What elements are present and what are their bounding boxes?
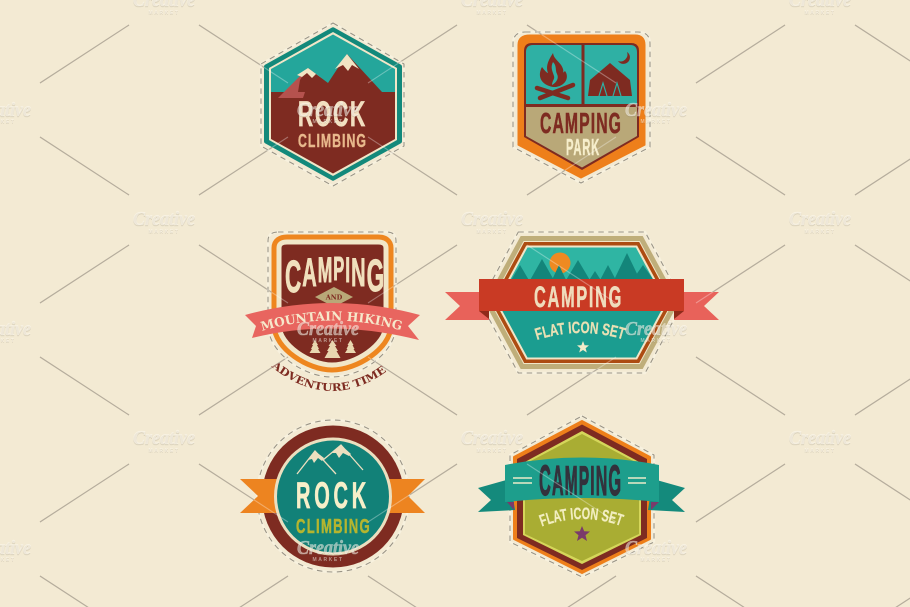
- watermarks: Creative: [461, 208, 523, 230]
- diamond: and: [315, 287, 353, 307]
- text: mountain hiking: MOUNTAIN HIKING: [260, 311, 402, 331]
- watermarks: MARKET: [476, 448, 508, 454]
- text: camping warped: I: [345, 250, 351, 290]
- ribbon: orange tails: [240, 479, 425, 513]
- ribbon: teal banner: [505, 458, 659, 502]
- scene panels: [526, 45, 637, 104]
- text: climbing: CLIMBING: [298, 131, 367, 151]
- text: camping: C: [539, 457, 552, 504]
- watermarks: Creative: [625, 318, 687, 340]
- text: camping: CAMPING: [540, 108, 622, 140]
- icon: star: [574, 526, 590, 541]
- text: rock: ROCK: [296, 475, 370, 516]
- badge: camping flat icon set hexagon: [445, 231, 719, 374]
- watermarks: MARKET: [312, 557, 344, 563]
- watermarks: Creative: [133, 427, 195, 449]
- text: camping warped: A: [302, 249, 318, 295]
- watermarks: MARKET: [640, 338, 672, 344]
- text: adventure time: ADVENTURE TIME: [271, 363, 386, 392]
- text: camping: N: [596, 457, 608, 504]
- mountains: [271, 54, 395, 174]
- watermarks: MARKET: [640, 557, 672, 563]
- ribbon tails: [478, 479, 685, 512]
- watermarks: MARKET: [476, 229, 508, 235]
- watermarks: MARKET: [804, 10, 836, 16]
- text: camping warped: C: [285, 252, 302, 302]
- icon: star: [577, 341, 589, 352]
- text: camping: P: [579, 457, 590, 504]
- watermarks: MARKET: [148, 10, 180, 16]
- badge: rock climbing circle: [240, 420, 425, 572]
- text: camping warped: G: [367, 251, 385, 301]
- text: camping: I: [590, 457, 596, 504]
- watermarks: Creative: [789, 427, 851, 449]
- watermarks: MARKET: [640, 119, 672, 125]
- text: flat icon set: FLAT ICON SET: [538, 507, 625, 526]
- icon: campfire: [537, 53, 573, 98]
- watermarks: Creative: [297, 537, 359, 559]
- text: camping: CAMPING: [534, 281, 623, 314]
- landscape panel: [502, 248, 661, 358]
- badge: camping park shield: [513, 32, 650, 183]
- text: camping warped: N: [351, 249, 367, 295]
- text: camping: A: [552, 457, 565, 504]
- watermarks: MARKET: [312, 119, 344, 125]
- sky: [271, 34, 395, 92]
- watermarks: Creative: [133, 208, 195, 230]
- watermarks: Creative: [297, 318, 359, 340]
- ribbon tails: [445, 292, 719, 320]
- text: flat icon set: FLAT ICON SET: [534, 321, 626, 340]
- ribbon: mountain hiking: [245, 303, 420, 340]
- watermarks: Creative: [297, 99, 359, 121]
- diamond: and: AND: [325, 294, 343, 302]
- icon: tent and moon: [588, 52, 632, 96]
- text: camping warped: M: [318, 250, 333, 290]
- text: camping: M: [565, 457, 579, 504]
- badge: camping park shield: PARK: [566, 134, 600, 160]
- icon: mountain outline: [297, 445, 363, 474]
- text: rock: ROCK: [298, 95, 367, 134]
- badge: camping flat icon set olive hexagon: [478, 415, 685, 578]
- ribbon: red banner: [479, 279, 684, 311]
- text: camping warped: P: [333, 250, 345, 288]
- watermarks: MARKET: [476, 10, 508, 16]
- decorative double lines: [513, 478, 646, 483]
- text: camping: G: [608, 457, 622, 504]
- icon: pine trees: [310, 340, 356, 358]
- badge: rock climbing hexagon: [261, 23, 404, 186]
- watermarks: MARKET: [804, 448, 836, 454]
- badge: camping and mountain hiking shield: [245, 231, 420, 392]
- text: climbing: CLIMBING: [296, 515, 371, 538]
- watermarks: Creative: [625, 99, 687, 121]
- watermarks: MARKET: [312, 338, 344, 344]
- watermarks: MARKET: [148, 229, 180, 235]
- watermarks: Creative: [625, 537, 687, 559]
- watermarks: MARKET: [148, 448, 180, 454]
- watermarks: Creative: [461, 427, 523, 449]
- watermarks: Creative: [789, 208, 851, 230]
- watermarks: MARKET: [804, 229, 836, 235]
- lower panel: [526, 107, 637, 168]
